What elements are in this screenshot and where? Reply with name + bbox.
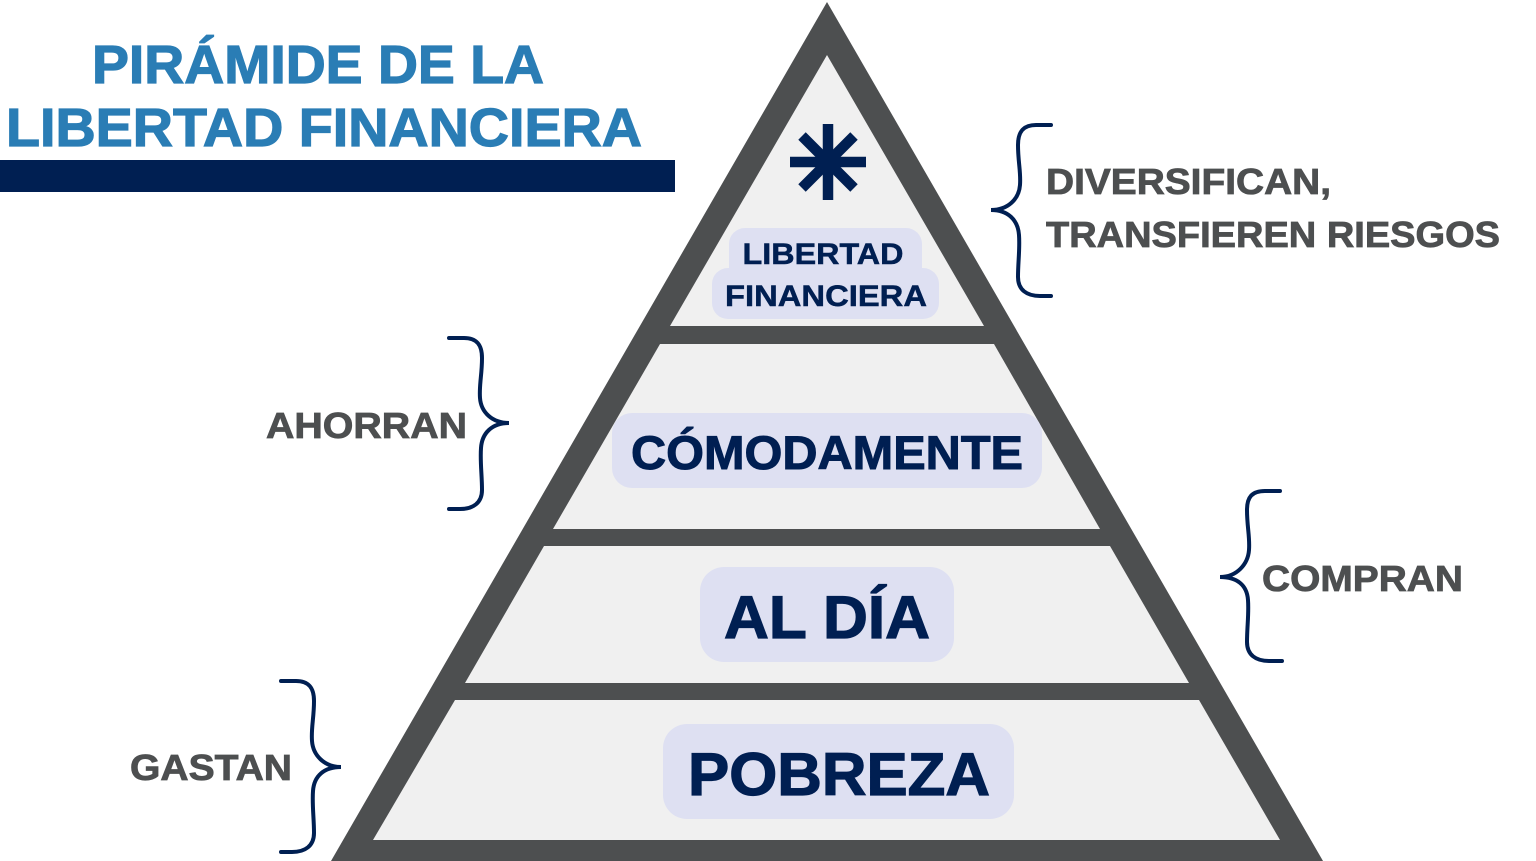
brace: compran [1220, 491, 1282, 661]
text: gastan: GASTAN [130, 747, 292, 788]
level: comodamente background [553, 344, 1100, 529]
label: pobreza: POBREZA [688, 741, 990, 808]
label: libertad financiera: LIBERTAD [742, 238, 904, 271]
title: LIBERTAD FINANCIERA [6, 98, 642, 158]
brace: gastan [281, 681, 341, 852]
title: PIRÁMIDE DE LA [92, 35, 544, 95]
title underline bar [0, 160, 675, 192]
text: ahorran: AHORRAN [266, 405, 467, 446]
text: compran: COMPRAN [1262, 558, 1463, 599]
pyramid outline [331, 2, 1323, 861]
pyramid [331, 2, 1323, 861]
level: libertad financiera background [670, 55, 984, 326]
level: pobreza background [373, 700, 1280, 840]
text: diversifican: TRANSFIEREN RIESGOS [1046, 214, 1500, 255]
label: al dia [700, 567, 954, 662]
title [6, 35, 642, 158]
brace: ahorran [449, 338, 509, 509]
text: diversifican [1046, 161, 1500, 255]
icon: asterisk [790, 124, 866, 200]
level: al dia background [465, 546, 1189, 683]
text: diversifican: DIVERSIFICAN, [1046, 161, 1331, 202]
label: pobreza [663, 724, 1014, 819]
label: comodamente [612, 413, 1042, 488]
label: al dia: AL DÍA [724, 584, 930, 651]
brace: diversifican [991, 125, 1051, 296]
label: libertad financiera [712, 228, 939, 319]
label: comodamente: CÓMODAMENTE [631, 426, 1023, 479]
label: libertad financiera: FINANCIERA [725, 280, 927, 313]
